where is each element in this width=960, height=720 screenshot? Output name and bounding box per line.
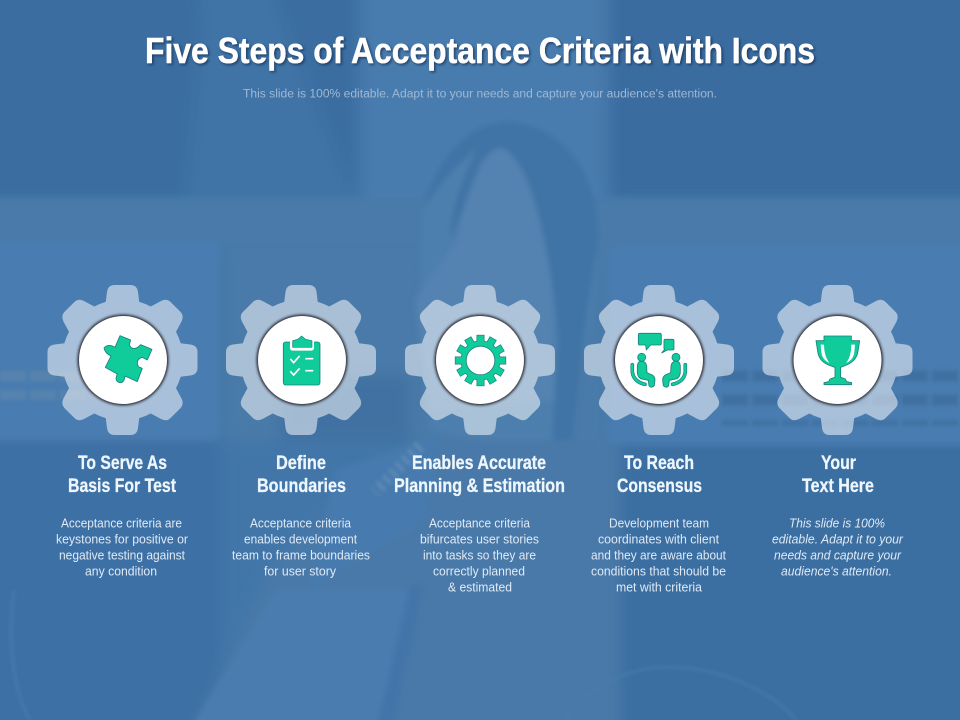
text: step 2: for user story bbox=[264, 565, 337, 579]
heading: step 2 bbox=[257, 452, 346, 497]
text: step 3: bifurcates user stories bbox=[420, 533, 539, 547]
heading: step 1: To Serve As bbox=[78, 452, 167, 474]
gear badge 1 bbox=[48, 285, 198, 435]
heading: step 5 bbox=[802, 452, 874, 497]
heading: step 5: Text Here bbox=[802, 475, 874, 497]
text: step 2 bbox=[232, 517, 370, 579]
text: step 4: met with criteria bbox=[616, 581, 702, 595]
panel: step 5 bbox=[762, 285, 912, 579]
heading: step 3: Planning & Estimation bbox=[394, 475, 565, 497]
heading: step 4 bbox=[617, 452, 702, 497]
panel: step 4 bbox=[584, 285, 734, 595]
text: step 3: & estimated bbox=[448, 581, 512, 595]
panel: step 1 bbox=[48, 285, 198, 579]
heading: step 5: Your bbox=[821, 452, 856, 474]
icon: trophy bbox=[816, 336, 860, 385]
text: step 1: negative testing against bbox=[59, 549, 186, 563]
text: step 1: Acceptance criteria are bbox=[61, 517, 182, 531]
text: step 5: This slide is 100% bbox=[789, 517, 885, 531]
panel: step 2 bbox=[226, 285, 376, 579]
heading: step 3 bbox=[394, 452, 565, 497]
text: step 4: conditions that should be bbox=[591, 565, 726, 579]
text: step 2: team to frame boundaries bbox=[232, 549, 370, 563]
text: step 4: Development team bbox=[609, 517, 709, 531]
heading: step 2: Boundaries bbox=[257, 475, 346, 497]
text: step 3: Acceptance criteria bbox=[429, 517, 530, 531]
text: step 5 bbox=[772, 517, 904, 579]
text: step 3: correctly planned bbox=[433, 565, 525, 579]
gear badge 3 bbox=[405, 285, 555, 435]
text: step 5: needs and capture your bbox=[774, 549, 902, 563]
heading: step 2: Define bbox=[276, 452, 326, 474]
gear badge 5 bbox=[762, 285, 912, 435]
icon: puzzle piece bbox=[104, 336, 152, 383]
heading: step 1 bbox=[68, 452, 176, 497]
text: step 1 bbox=[56, 517, 188, 579]
text: step 2: enables development bbox=[244, 533, 357, 547]
text: step 3 bbox=[420, 517, 539, 595]
text: step 1: keystones for positive or bbox=[56, 533, 188, 547]
panel: step 3 bbox=[394, 285, 565, 595]
gear badge 2 bbox=[226, 285, 376, 435]
icon: clipboard checklist bbox=[283, 336, 320, 385]
subtitle: This slide is 100% editable. Adapt it to your needs and capture your audience's attention. bbox=[243, 88, 717, 100]
text: step 5: editable. Adapt it to your bbox=[772, 533, 904, 547]
text: step 5: audience's attention. bbox=[781, 565, 892, 579]
icon: two people in conversation bbox=[632, 333, 685, 387]
text: step 2: Acceptance criteria bbox=[250, 517, 351, 531]
text: step 4: coordinates with client bbox=[598, 533, 720, 547]
gear badge 4 bbox=[584, 285, 734, 435]
heading: step 1: Basis For Test bbox=[68, 475, 176, 497]
text: step 4 bbox=[591, 517, 726, 595]
text: step 3: into tasks so they are bbox=[423, 549, 536, 563]
text: step 1: any condition bbox=[85, 565, 157, 579]
heading: step 4: To Reach bbox=[624, 452, 694, 474]
heading: step 3: Enables Accurate bbox=[412, 452, 546, 474]
icon: gear bbox=[456, 336, 505, 385]
text: step 4: and they are aware about bbox=[591, 549, 726, 563]
heading: step 4: Consensus bbox=[617, 475, 702, 497]
title: Five Steps of Acceptance Criteria with Icons bbox=[145, 30, 815, 71]
